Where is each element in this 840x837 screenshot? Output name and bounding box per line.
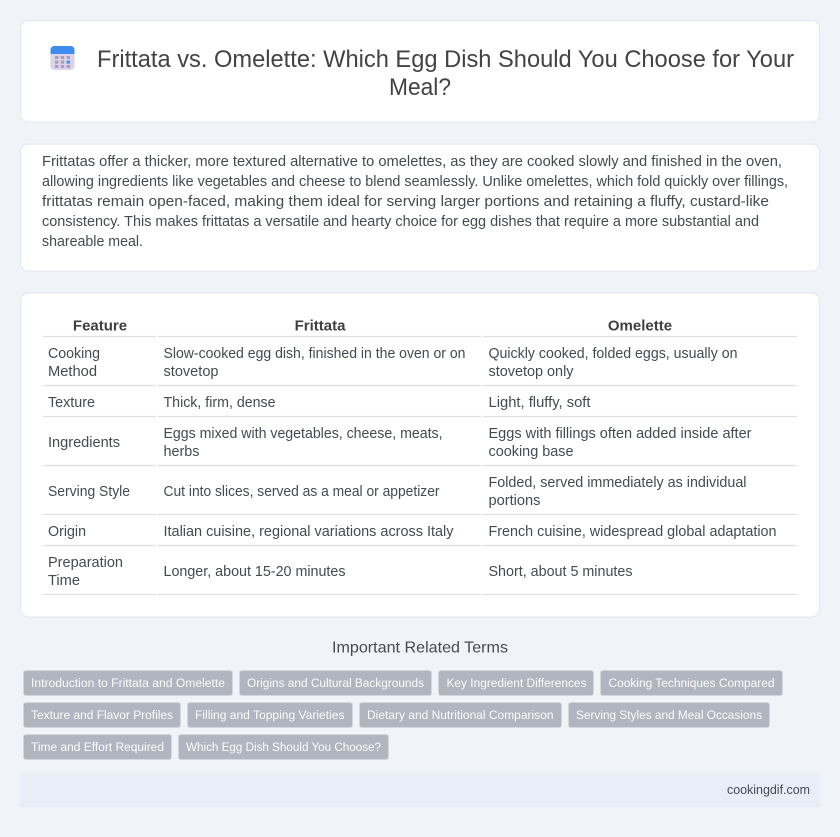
row: texture: Texture — [48, 395, 95, 411]
tag: Filling and Topping Varieties — [195, 708, 344, 722]
panel: introduction text — [20, 144, 820, 271]
tag — [178, 734, 388, 760]
title: Meal? — [389, 74, 451, 101]
tag: Cooking Techniques Compared — [608, 676, 775, 690]
row: ingredients: Eggs mixed with vegetables, cheese, meats, — [164, 426, 442, 442]
row: origin — [48, 524, 776, 540]
panel: comparison table — [20, 293, 820, 617]
text block: introduction: allowing ingredients like vegetables and cheese to blend seamlessly. Unlike omelettes, which fold quickly over fillings, — [42, 174, 788, 190]
tags: related terms — [24, 670, 782, 760]
tag: Serving Styles and Meal Occasions — [576, 708, 762, 722]
row: cooking method: Cooking — [48, 346, 100, 362]
footer: cookingdif.com — [727, 782, 810, 797]
row: preparation time — [48, 555, 632, 589]
tag — [24, 702, 180, 728]
tag — [24, 734, 172, 760]
heading: important related terms: Important Related Terms — [332, 640, 508, 656]
row: ingredients — [48, 426, 752, 460]
row: ingredients: Eggs with fillings often added inside after — [488, 426, 752, 442]
row: serving style: Folded, served immediately as individual — [488, 475, 746, 491]
row: texture — [48, 395, 590, 411]
row: ingredients: Ingredients — [48, 435, 120, 451]
panel: title card — [20, 20, 820, 122]
tag: Time and Effort Required — [31, 740, 164, 754]
tag: Origins and Cultural Backgrounds — [247, 676, 424, 690]
row: cooking method: Quickly cooked, folded eggs, usually on — [488, 346, 738, 362]
tag: Dietary and Nutritional Comparison — [367, 708, 554, 722]
text block: introduction: frittatas remain open-faced, making them ideal for serving larger portions and retaining a fluffy, custard-like — [42, 194, 769, 210]
row: serving style: Serving Style — [48, 484, 130, 500]
tag: Texture and Flavor Profiles — [31, 708, 173, 722]
tag: Key Ingredient Differences — [446, 676, 586, 690]
tag — [188, 702, 352, 728]
tag: Which Egg Dish Should You Choose? — [186, 740, 381, 754]
row: ingredients: herbs — [164, 444, 200, 460]
row: cooking method — [48, 346, 738, 380]
text block: introduction: Frittatas offer a thicker, more textured alternative to omelettes, as they are cooked slowly and finished in the oven, — [42, 154, 782, 170]
row: origin: Italian cuisine, regional variations across Italy — [164, 524, 454, 540]
title: Frittata vs. Omelette: Which Egg Dish Should You Choose for Your — [97, 46, 794, 73]
footer — [20, 773, 820, 807]
row: preparation time: Time — [48, 573, 80, 589]
tag — [360, 702, 562, 728]
row: serving style — [48, 475, 746, 509]
table header — [73, 318, 672, 334]
row: serving style: Cut into slices, served as a meal or appetizer — [164, 484, 440, 500]
table header: Frittata — [295, 318, 346, 334]
table header: Feature — [73, 318, 127, 334]
tag — [600, 670, 782, 696]
row: cooking method: Method — [48, 364, 97, 380]
row: texture: Thick, firm, dense — [164, 395, 276, 411]
row: texture: Light, fluffy, soft — [488, 395, 590, 411]
tag — [240, 670, 432, 696]
row: origin: French cuisine, widespread global adaptation — [488, 524, 776, 540]
text block: introduction: shareable meal. — [42, 234, 143, 250]
icon: calendar — [50, 46, 74, 70]
table header: Omelette — [608, 318, 672, 334]
row: cooking method: stovetop — [164, 364, 218, 380]
tag — [438, 670, 594, 696]
tag — [24, 670, 232, 696]
row: cooking method: stovetop only — [488, 364, 574, 380]
tag — [568, 702, 770, 728]
title — [97, 46, 794, 101]
row: origin: Origin — [48, 524, 86, 540]
row: ingredients: cooking base — [488, 444, 574, 460]
row: cooking method: Slow-cooked egg dish, finished in the oven or on — [164, 346, 466, 362]
text block: introduction: consistency. This makes frittatas a versatile and hearty choice for egg dishes that require a more substantial and — [42, 214, 759, 230]
row: preparation time: Preparation — [48, 555, 123, 571]
row: serving style: portions — [488, 493, 540, 509]
row: preparation time: Longer, about 15-20 minutes — [164, 564, 346, 580]
tag: Introduction to Frittata and Omelette — [31, 676, 225, 690]
text block: introduction — [42, 154, 788, 250]
row: preparation time: Short, about 5 minutes — [488, 564, 632, 580]
